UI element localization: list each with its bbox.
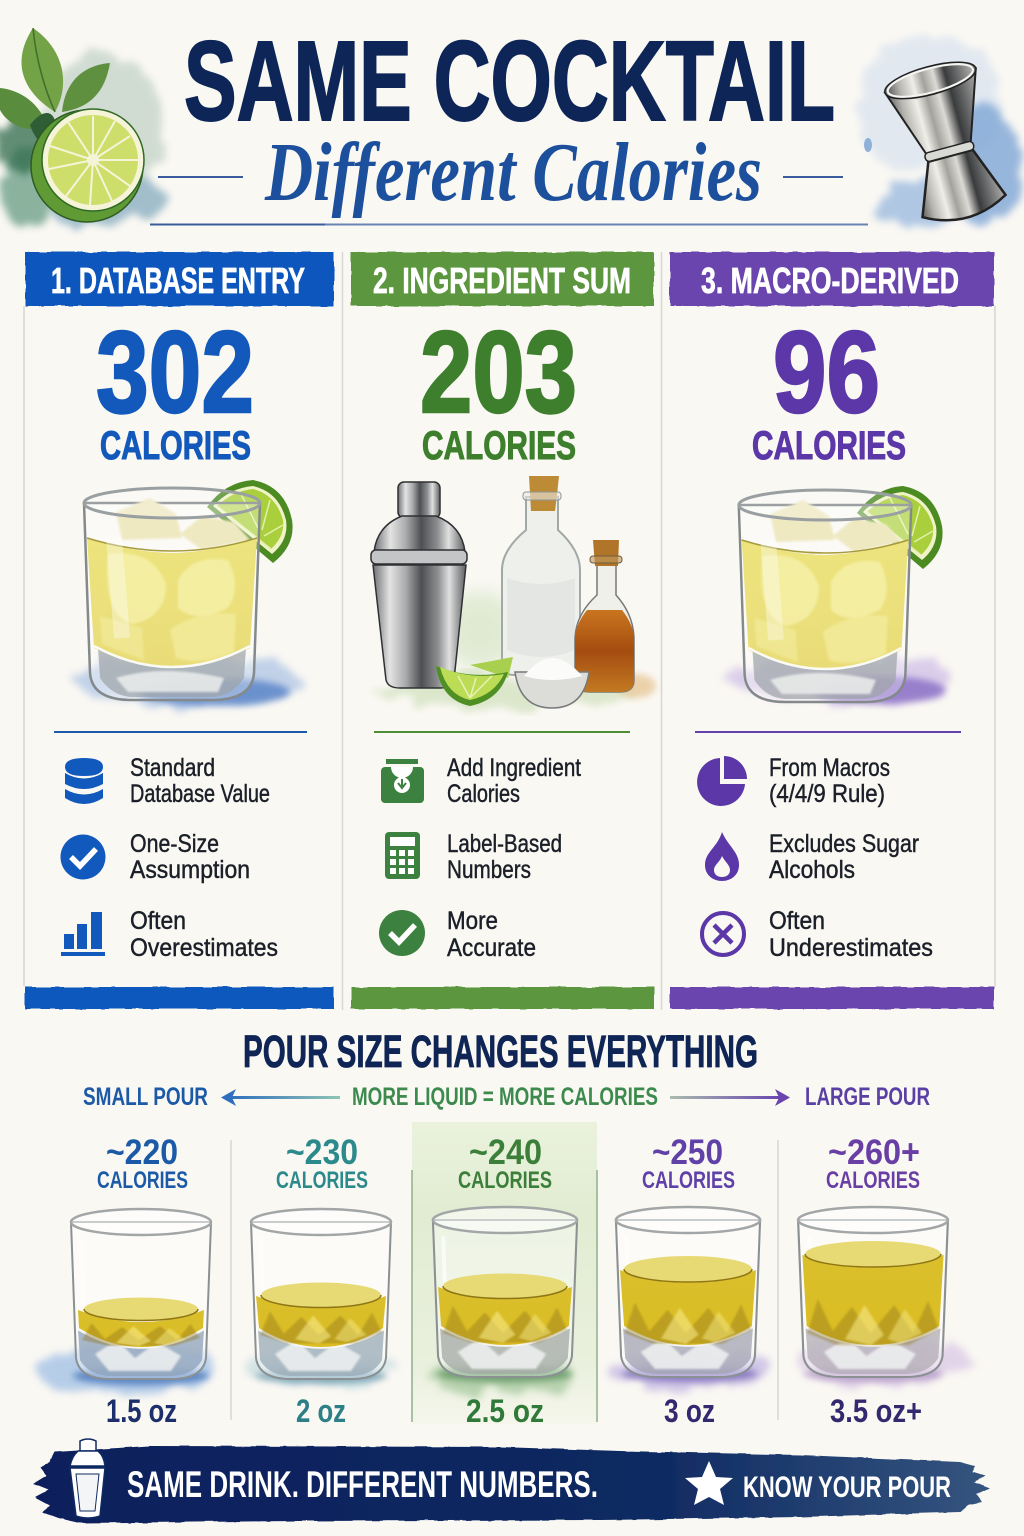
banner message: SAME DRINK. DIFFERENT NUMBERS.	[127, 1464, 598, 1505]
divider	[695, 731, 961, 733]
icon: kitchen scale	[381, 759, 424, 803]
pour column: 3 oz	[612, 1133, 768, 1429]
list item: often overestimates: Overestimates	[130, 934, 278, 962]
list item: standard database value: Standard	[130, 754, 215, 782]
list item: one-size assumption	[130, 830, 250, 884]
panel: database entry	[25, 252, 334, 1009]
number: 203 calories	[420, 307, 577, 468]
icon: check circle	[60, 834, 106, 880]
pour column: 2 oz	[243, 1133, 399, 1429]
glass: 3 oz	[612, 1207, 768, 1392]
header ribbon: ingredient sum	[351, 252, 654, 306]
number: 203 calories: 203	[420, 307, 577, 437]
amber bottle	[575, 540, 634, 692]
amount: 2.5 oz: 2.5 oz	[466, 1393, 544, 1429]
panel frames	[24, 252, 995, 1010]
header ribbon: macro-derived	[670, 252, 994, 306]
arrow: towards small pour	[221, 1089, 340, 1106]
list item: often overestimates: Often	[130, 907, 186, 935]
label: 230 calories: CALORIES	[276, 1167, 368, 1194]
number: 302 calories	[96, 307, 254, 468]
subtitle rules	[150, 177, 868, 224]
list item: standard database value: Database Value	[130, 780, 270, 808]
list item: label-based numbers: Label-Based	[447, 830, 562, 858]
list item: add ingredient calories	[447, 754, 581, 808]
list item: more accurate: More	[447, 907, 498, 935]
list item: one-size assumption: Assumption	[130, 856, 250, 884]
scale label: small pour: SMALL POUR	[83, 1083, 208, 1111]
icon: database	[65, 758, 103, 804]
list item: from macros: From Macros	[769, 754, 890, 782]
list item: from macros	[769, 754, 890, 808]
icon: bar chart	[61, 912, 105, 956]
list item: add ingredient calories: Add Ingredient	[447, 754, 581, 782]
label: 260+ calories	[826, 1133, 920, 1194]
number: 96 calories: CALORIES	[752, 424, 906, 468]
list item: excludes sugar alcohols: Alcohols	[769, 856, 855, 884]
footer bar: database entry	[25, 987, 334, 1009]
label: 240 calories: CALORIES	[458, 1167, 552, 1194]
label: 260+ calories: ~260+	[828, 1133, 920, 1172]
highlight column	[412, 1122, 597, 1424]
banner	[33, 1439, 990, 1523]
divider	[374, 731, 630, 733]
label: 250 calories	[642, 1133, 735, 1194]
icon: cocktail shaker	[70, 1439, 105, 1518]
panel: macro-derived	[670, 252, 994, 1009]
glass: 2.5 oz	[433, 1207, 577, 1394]
list item: often overestimates	[130, 907, 278, 962]
label: 230 calories: ~230	[286, 1133, 358, 1172]
list item: often underestimates: Underestimates	[769, 934, 933, 962]
icon: star	[685, 1461, 733, 1505]
amount: 2 oz: 2 oz	[296, 1393, 346, 1429]
header ribbon: ingredient sum: 2. INGREDIENT SUM	[373, 260, 631, 301]
list item: more accurate	[447, 907, 536, 962]
list item: often underestimates	[769, 907, 933, 962]
icon: check circle	[379, 910, 425, 956]
panel: ingredient sum	[351, 252, 656, 1009]
column dividers	[231, 1140, 778, 1422]
scale label: more liquid: MORE LIQUID = MORE CALORIES	[352, 1083, 658, 1111]
header ribbon: database entry	[25, 252, 334, 306]
list item: excludes sugar alcohols: Excludes Sugar	[769, 830, 919, 858]
amount: 1.5 oz: 1.5 oz	[106, 1393, 177, 1429]
label: 240 calories: ~240	[469, 1133, 542, 1172]
list item: excludes sugar alcohols	[769, 830, 919, 884]
divider	[54, 731, 307, 733]
illustration: lime and mint leaves	[0, 28, 168, 226]
pour column: 3.5 oz plus	[798, 1133, 969, 1429]
icon: flame	[705, 832, 739, 881]
list item: more accurate: Accurate	[447, 934, 536, 962]
icon: calculator	[385, 832, 420, 879]
footer bar: ingredient sum	[351, 987, 654, 1009]
footer bar: macro-derived	[670, 987, 994, 1009]
pour column: 1.5 oz	[37, 1133, 213, 1429]
label: 220 calories: ~220	[106, 1133, 178, 1172]
icon: pie chart	[697, 756, 747, 806]
icon: x circle	[702, 913, 744, 955]
list item: label-based numbers	[447, 830, 562, 884]
list item: standard database value	[130, 754, 270, 808]
label: 220 calories	[97, 1133, 188, 1194]
header ribbon: database entry: 1. DATABASE ENTRY	[51, 260, 305, 301]
illustration: shaker, bottles, lime and salt	[371, 476, 656, 708]
list item: one-size assumption: One-Size	[130, 830, 219, 858]
label: 260+ calories: CALORIES	[826, 1167, 920, 1194]
amount: 3.5 oz plus: 3.5 oz+	[830, 1393, 922, 1429]
list item: often underestimates: Often	[769, 907, 825, 935]
number: 302 calories: CALORIES	[100, 424, 251, 468]
banner tagline: KNOW YOUR POUR	[743, 1471, 951, 1504]
list item: add ingredient calories: Calories	[447, 780, 520, 808]
glass: 2 oz	[243, 1209, 399, 1386]
pour column: 2.5 oz	[433, 1133, 577, 1429]
label: 250 calories: ~250	[652, 1133, 723, 1172]
list item: label-based numbers: Numbers	[447, 856, 531, 884]
label: 240 calories	[458, 1133, 552, 1194]
label: 230 calories	[276, 1133, 368, 1194]
amount: 3 oz: 3 oz	[664, 1393, 715, 1429]
illustration: metal jigger	[858, 37, 1023, 230]
clear bottle	[502, 476, 580, 675]
cocktail shaker	[371, 482, 467, 688]
subtitle: Different Calories	[264, 126, 762, 219]
section heading: POUR SIZE CHANGES EVERYTHING	[243, 1026, 758, 1077]
number: 203 calories: CALORIES	[422, 424, 576, 468]
scale label: large pour: LARGE POUR	[805, 1083, 930, 1111]
number: 96 calories: 96	[773, 307, 880, 437]
number: 96 calories	[752, 307, 906, 468]
label: 220 calories: CALORIES	[97, 1167, 188, 1194]
glass: 1.5 oz	[37, 1209, 213, 1392]
salt bowl	[515, 658, 589, 708]
illustration: full cocktail glass with lime	[63, 480, 307, 706]
list item: from macros: (4/4/9 Rule)	[769, 780, 885, 808]
lime wedge	[436, 657, 513, 706]
glass: 3.5 oz plus	[798, 1207, 969, 1386]
label: 250 calories: CALORIES	[642, 1167, 735, 1194]
number: 302 calories: 302	[96, 307, 254, 437]
arrow: towards large pour	[670, 1089, 790, 1106]
illustration: full cocktail glass with lime	[724, 486, 956, 704]
